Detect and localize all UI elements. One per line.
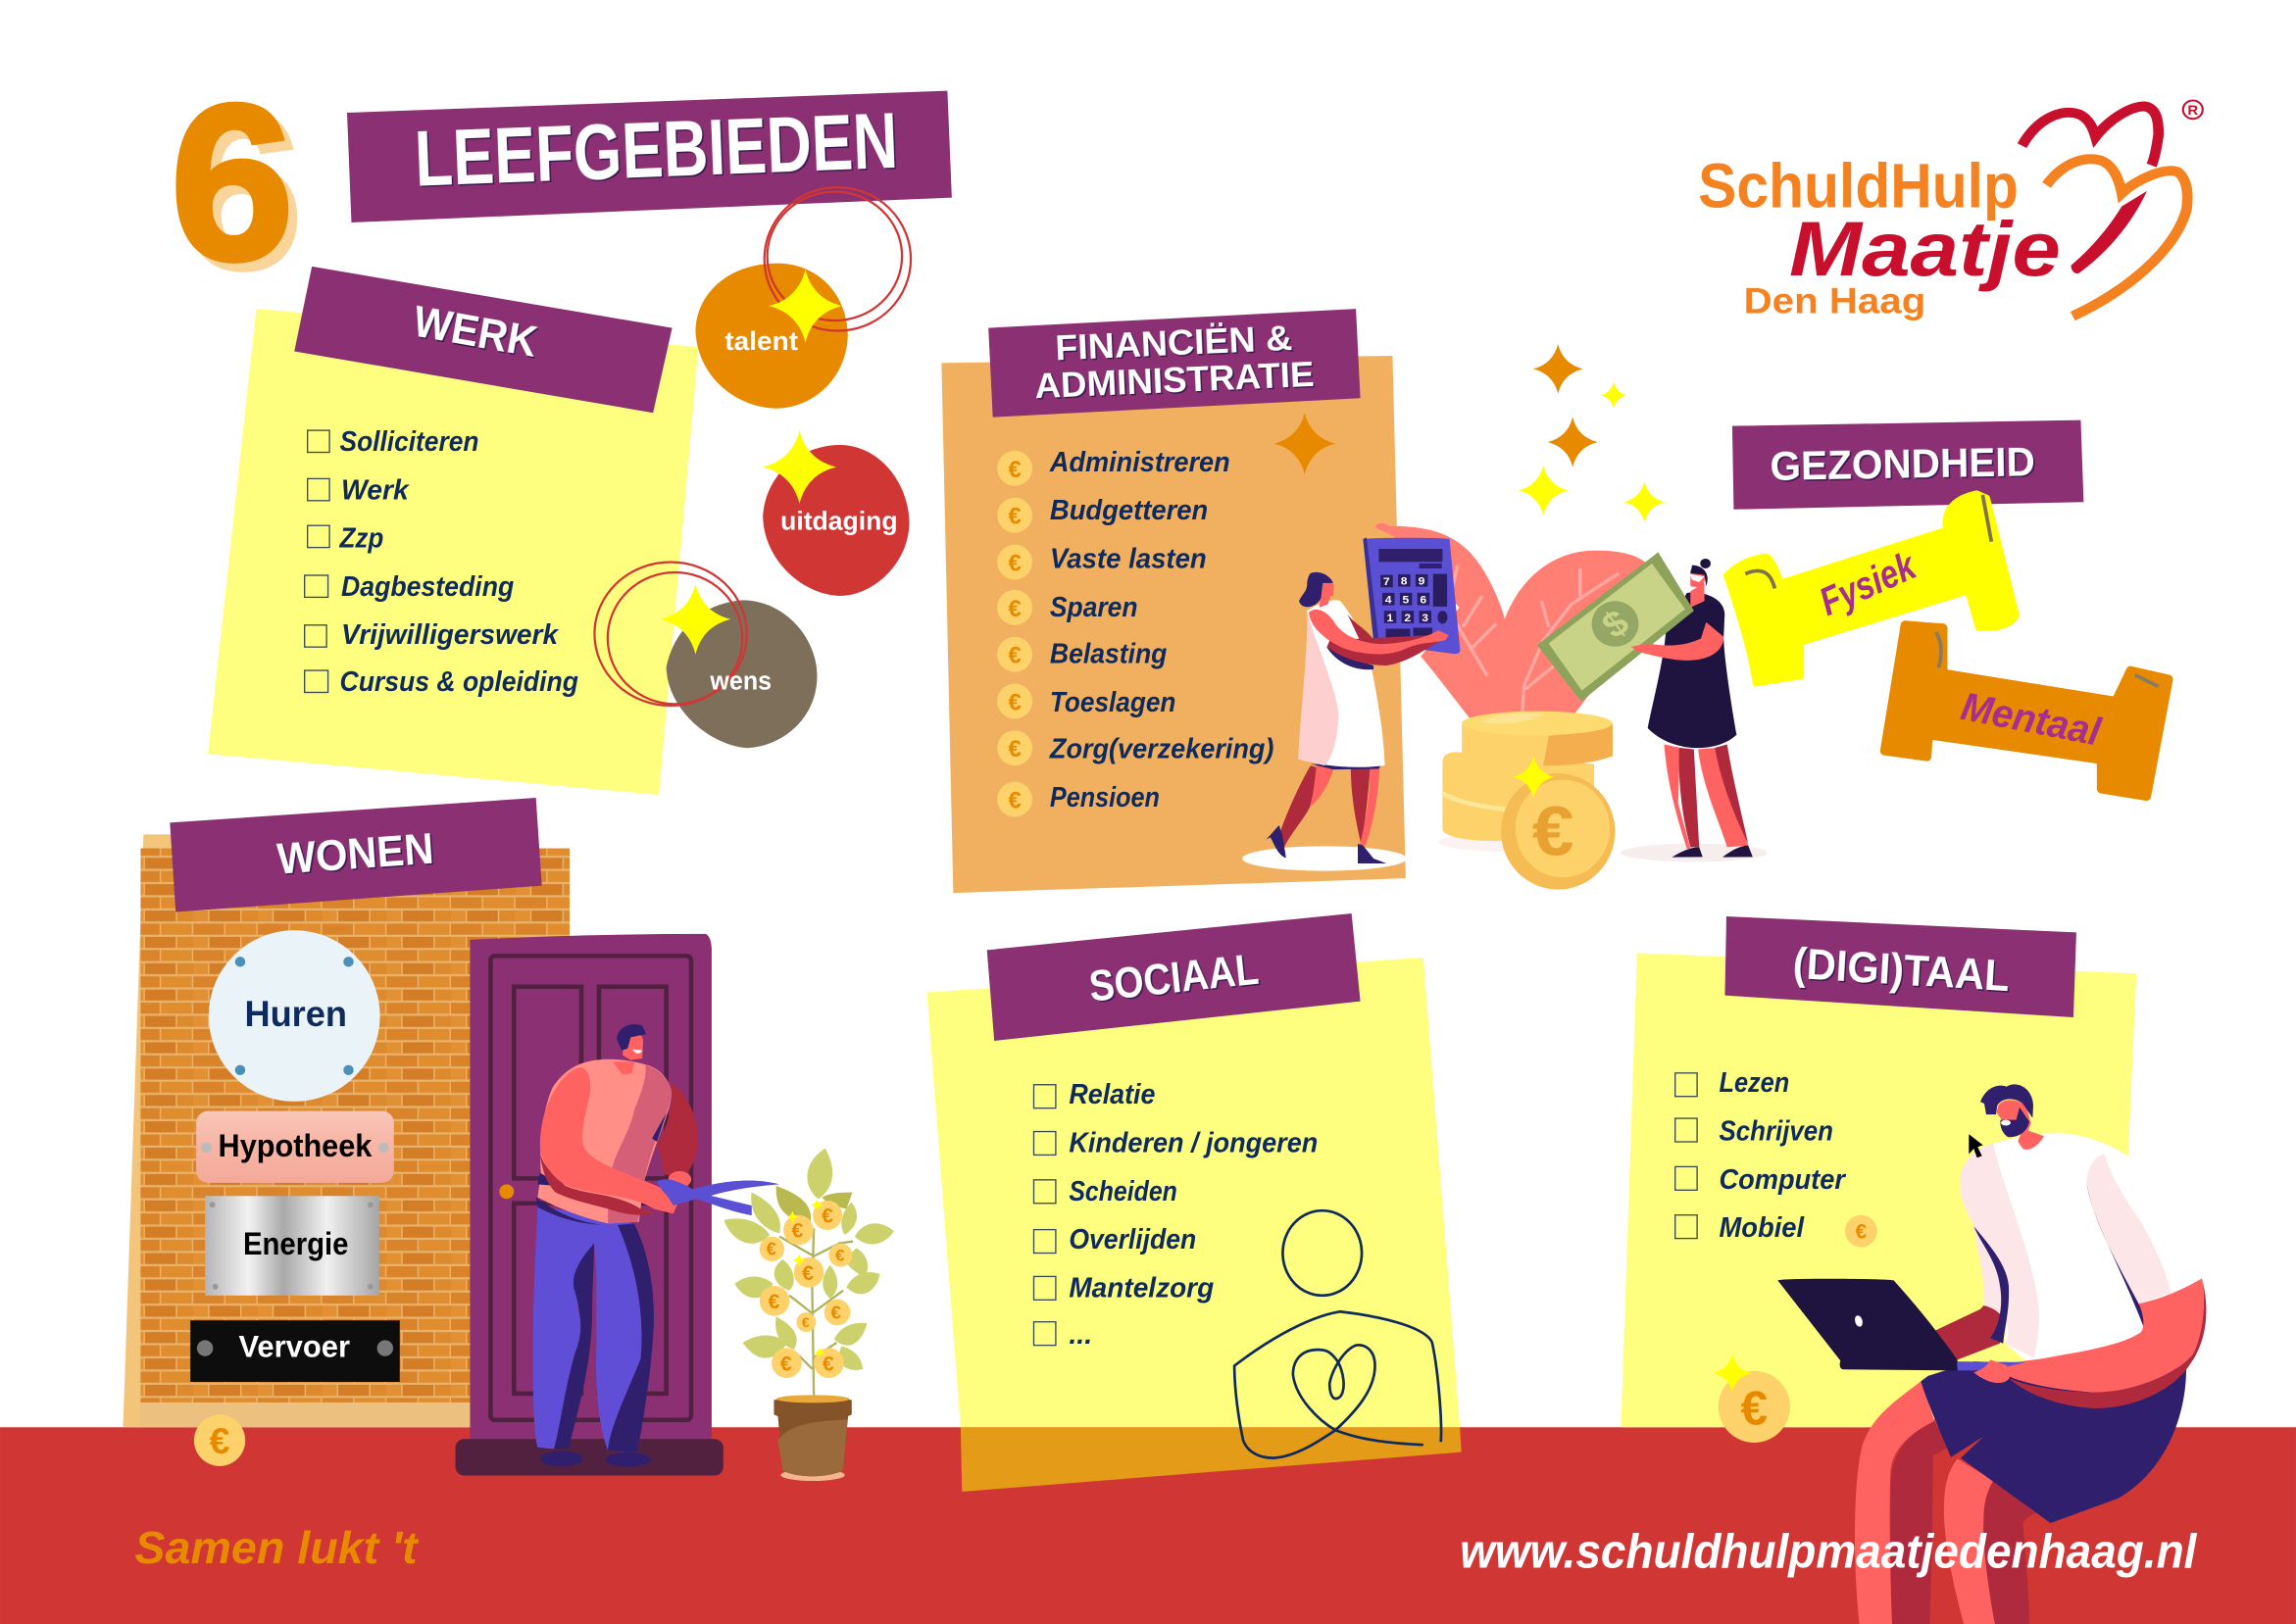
laptop (1777, 1279, 2026, 1370)
euro coin (194, 1415, 245, 1466)
financien list: Vaste lasten (1050, 544, 1207, 575)
mouse cursor (1969, 1134, 1983, 1157)
big euro coin (1501, 757, 1615, 890)
money plant: € (791, 1219, 803, 1243)
financien list: € (1008, 643, 1022, 669)
man with scissors (533, 1024, 894, 1481)
financien list: Budgetteren (1050, 495, 1208, 526)
panel: digitaal (1621, 916, 2136, 1443)
calculator: 2 (1404, 612, 1412, 624)
money plant: € (802, 1314, 810, 1330)
money plant: € (835, 1247, 844, 1265)
footer slogan: Samen lukt 't (134, 1522, 419, 1573)
money plant: € (831, 1303, 842, 1323)
digitaal checklist (1675, 1067, 1847, 1244)
werk checklist: Cursus & opleiding (340, 666, 578, 698)
woman's arm (1309, 610, 1449, 665)
small euro coin (1845, 1215, 1877, 1248)
illustration: sparkle stars (1519, 344, 1665, 522)
gezondheid heading (1732, 420, 2083, 510)
torso (537, 1059, 672, 1223)
panel: gezondheid (1726, 420, 2169, 797)
money plant: € (780, 1352, 792, 1375)
banknote: $ (1595, 603, 1637, 647)
money plant: € (823, 1352, 834, 1375)
financien list: Administreren (1049, 447, 1230, 478)
panel: wonen (123, 798, 570, 1466)
digitaal checklist: Computer (1720, 1164, 1847, 1196)
shorts (1921, 1361, 2186, 1523)
calculator: 5 (1403, 594, 1410, 606)
sociaal checklist: Scheiden (1069, 1176, 1177, 1207)
illustration: money exchange (1242, 523, 1768, 890)
banknote (1537, 552, 1694, 702)
door (456, 934, 724, 1476)
sign: huren: Huren (244, 993, 347, 1034)
financien heading: ADMINISTRATIE (1034, 355, 1315, 406)
calculator (1363, 537, 1460, 654)
logo (1698, 100, 2203, 321)
digitaal checklist: Lezen (1720, 1067, 1789, 1099)
calculator: 7 (1383, 576, 1390, 588)
panel: financien en administratie (941, 309, 1406, 893)
wonen heading: WONEN (275, 824, 435, 884)
neck and head (2018, 1129, 2044, 1150)
financien list: € (1008, 787, 1022, 813)
sociaal heading (987, 913, 1361, 1041)
sign: hypotheek (196, 1111, 394, 1183)
sign: energie: Energie (243, 1225, 348, 1261)
front arm (540, 1154, 657, 1215)
panel: werk (208, 267, 698, 795)
blob: uitdaging (763, 430, 910, 596)
title banner: LEEFGEBIEDEN (413, 97, 899, 204)
werk checklist: Vrijwilligerswerk (341, 619, 559, 651)
logo: Den Haag (1744, 280, 1925, 321)
back arm (657, 1081, 698, 1176)
dumbbell: fysiek (1726, 493, 2017, 684)
digitaal checklist: Mobiel (1720, 1212, 1805, 1244)
sociaal heading: SOCIAAL (1087, 945, 1261, 1011)
money plant: € (767, 1240, 776, 1259)
financien list: € (1008, 689, 1022, 715)
calculator: 4 (1385, 594, 1392, 606)
werk checklist: Zzp (339, 523, 383, 555)
financien list: € (1008, 551, 1022, 577)
footer url: www.schuldhulpmaatjedenhaag.nl (1460, 1525, 2198, 1579)
sign: vervoer (190, 1320, 400, 1382)
head (613, 1061, 634, 1075)
near arm (2008, 1279, 2206, 1408)
calculator: 6 (1420, 594, 1427, 606)
werk checklist: Dagbesteding (341, 571, 514, 603)
blob: talent: talent (724, 326, 798, 356)
gezondheid heading: GEZONDHEID (1770, 438, 2035, 489)
woman with calculator (1266, 572, 1386, 863)
logo: R (2187, 103, 2199, 119)
sociaal checklist (1033, 1079, 1318, 1351)
digitaal heading: (DIGI)TAAL (1792, 939, 2011, 1001)
flower pot (780, 1469, 845, 1481)
sign: energie (205, 1196, 379, 1296)
dumbbell: mentaal (1884, 625, 2169, 797)
digitaal checklist: Schrijven (1720, 1116, 1833, 1148)
money plant (724, 1149, 894, 1481)
calculator: 3 (1422, 612, 1428, 624)
werk checklist: Werk (341, 474, 410, 506)
financien list: Sparen (1050, 592, 1138, 623)
man with laptop (1777, 1084, 2206, 1624)
money plant: € (802, 1261, 814, 1285)
orange star (1273, 413, 1335, 474)
werk heading: WERK (410, 297, 541, 367)
euro coin: € (210, 1420, 230, 1461)
big euro coin with star: € (1741, 1381, 1768, 1435)
dumbbell: mentaal: Mentaal (1958, 683, 2105, 755)
far arm (1934, 1305, 2000, 1359)
shirt (1960, 1133, 2202, 1369)
big euro coin: € (1532, 792, 1574, 870)
hand on banknote (1631, 622, 1723, 661)
ground shadows (1242, 846, 1407, 871)
financien list: € (1008, 504, 1022, 530)
legs (1890, 1419, 1948, 1624)
calculator: 8 (1401, 575, 1408, 587)
werk checklist: Solliciteren (340, 426, 478, 458)
big number 6: 6 (170, 58, 294, 307)
financien heading: FINANCIËN & (1055, 319, 1293, 368)
small euro coin: € (1856, 1221, 1868, 1244)
trousers (533, 1206, 654, 1452)
financien list: Belasting (1050, 639, 1167, 670)
blob: wens: wens (709, 665, 772, 695)
logo: SchuldHulp (1698, 151, 2019, 221)
blob: talent (695, 187, 911, 409)
pink heart (1375, 523, 1656, 718)
calculator: 1 (1386, 612, 1394, 624)
woman with banknote (1648, 559, 1753, 858)
financien list: € (1008, 457, 1022, 483)
dumbbell: fysiek: Fysiek (1813, 542, 1923, 624)
werk heading (294, 267, 673, 413)
financien list: Zorg(verzekering) (1049, 734, 1273, 765)
hand (1973, 1359, 2010, 1383)
financien list: € (1008, 596, 1022, 622)
logo: Maatje (1789, 206, 2061, 292)
werk checklist (305, 426, 578, 698)
red footer band (0, 1427, 2296, 1624)
panel: sociaal (926, 913, 1462, 1492)
financien heading (988, 309, 1361, 418)
sociaal checklist: Overlijden (1069, 1224, 1196, 1255)
scissors (657, 1179, 779, 1215)
money plant: € (768, 1290, 779, 1313)
money plant: € (822, 1205, 833, 1228)
blob: uitdaging: uitdaging (780, 507, 898, 536)
sign: huren (209, 930, 380, 1102)
wonen heading (170, 798, 542, 912)
financien list (997, 447, 1273, 816)
coin stacks (1442, 712, 1613, 841)
calculator: 9 (1419, 575, 1425, 587)
blob: wens (594, 563, 817, 748)
line art: person with heart (1234, 1210, 1441, 1458)
financien list: Toeslagen (1050, 687, 1175, 718)
sign: vervoer: Vervoer (238, 1330, 350, 1364)
financien list: Pensioen (1050, 782, 1160, 813)
sociaal checklist: Kinderen / jongeren (1069, 1127, 1318, 1158)
sign: hypotheek: Hypotheek (219, 1127, 373, 1163)
digitaal heading (1724, 916, 2076, 1017)
big euro coin with star (1714, 1354, 1790, 1443)
financien list: € (1008, 736, 1022, 763)
sociaal checklist: Mantelzorg (1069, 1272, 1214, 1304)
sociaal checklist: ... (1069, 1319, 1092, 1351)
sociaal checklist: Relatie (1069, 1079, 1155, 1110)
title banner (347, 91, 952, 222)
